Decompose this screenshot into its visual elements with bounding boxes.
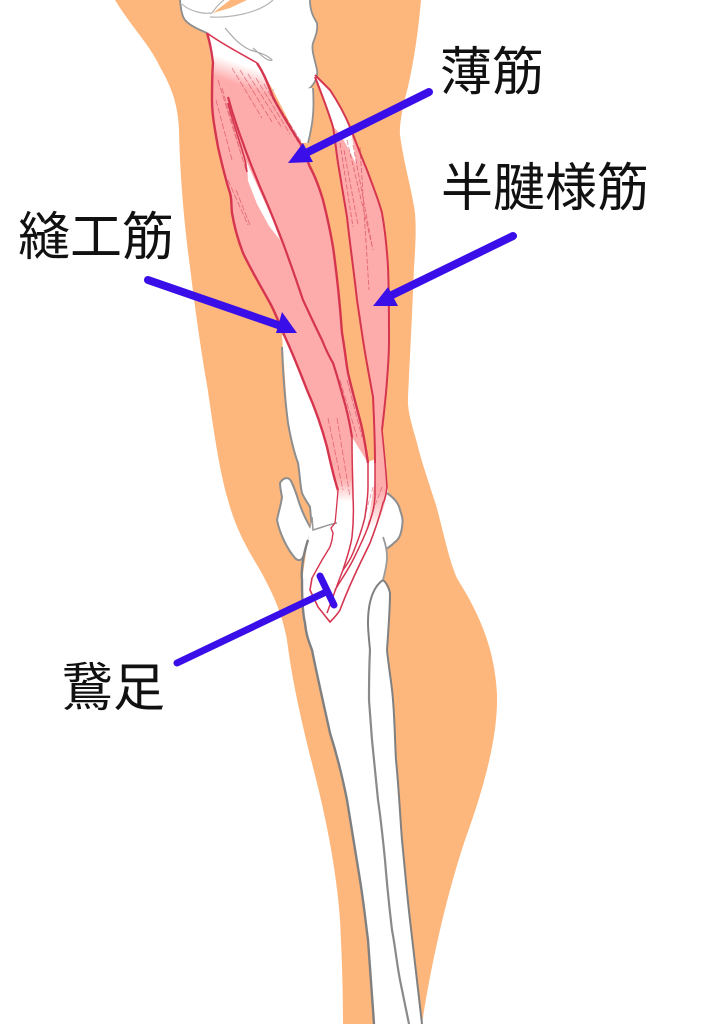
muscle: semitendinosus bbox=[315, 75, 389, 534]
label: pes anserinus: 鵞足 bbox=[61, 660, 165, 718]
arrow: semitendinosus bbox=[373, 236, 513, 306]
pelvis bone bbox=[180, 0, 317, 94]
label: semitendinosus: 半腱様筋 bbox=[441, 160, 649, 218]
tibia and fibula bbox=[302, 517, 422, 1024]
muscle: sartorius and gracilis bbox=[207, 33, 368, 506]
arrow: gracilis bbox=[288, 92, 429, 163]
label: gracilis: 薄筋 bbox=[440, 44, 544, 102]
label: sartorius: 縫工筋 bbox=[18, 209, 174, 267]
femur shaft lower bbox=[282, 335, 402, 552]
leg silhouette bbox=[115, 0, 497, 1024]
patella bbox=[277, 478, 312, 560]
arrow: sartorius bbox=[148, 280, 297, 333]
marker line: pes anserinus bbox=[177, 576, 334, 663]
pes anserinus tendons bbox=[310, 430, 387, 622]
femur shaft upper bbox=[273, 88, 313, 143]
femoral condyle bbox=[383, 493, 403, 550]
